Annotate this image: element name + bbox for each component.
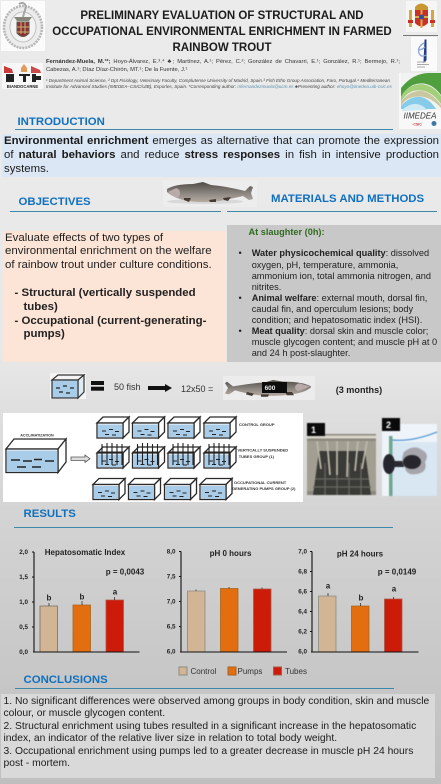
logo: Spanish coat of arms (406, 1, 437, 32)
chart: pH 24 hours: a (392, 584, 397, 594)
panel: materials and methods: Animal welfare: external mouth, dorsal fin, (252, 293, 427, 303)
logo: IMEDEA (399, 73, 441, 129)
chart: pH 0 hours: 6,0 (167, 648, 176, 656)
chart: pH 0 hours: pH 0 hours (210, 549, 252, 558)
heading: materials and methods: MATERIALS AND METHODS (271, 193, 424, 205)
panel: objectives (3, 230, 226, 362)
panel: objectives: of rainbow trout under culture conditions. (5, 259, 212, 271)
chart: pH 24 hours: 6,4 (298, 608, 307, 616)
panel: materials and methods: • (238, 326, 242, 336)
panel: conclusions: 1. No significant differences were observed among groups in body condition, skin and muscle (4, 696, 429, 706)
chart: pH 24 hours: 6,0 (298, 648, 307, 656)
title: PRELIMINARY EVALUATION OF STRUCTURAL AND (80, 10, 364, 22)
image: trout with total count (223, 376, 315, 400)
panel: materials and methods: condition; and hepatosomatic index (HSI). (252, 315, 422, 325)
panel: conclusions: post - mortem. (4, 758, 70, 769)
chart: hepatosomatic index: 1,5 (19, 574, 28, 581)
chart: pH 24 hours: 6,8 (298, 568, 307, 576)
control group tanks (97, 417, 236, 438)
panel: materials and methods: Meat quality: dorsal skin and muscle color; (252, 326, 428, 336)
chart: pH 0 hours: 7,0 (167, 598, 176, 606)
panel: introduction: Environmental enrichment emerges as alternative that can promote the expression (4, 135, 439, 147)
chart: pH 24 hours (298, 548, 418, 656)
chart: pH 0 hours: 6,5 (167, 624, 176, 630)
large acclimatization tank (6, 434, 66, 472)
experimental design row (50, 373, 382, 400)
heading: objectives: OBJECTIVES (18, 196, 91, 208)
chart: pH 24 hours: 6,6 (298, 588, 307, 596)
panel: conclusions: 2. Structural enrichment using tubes resulted in a significant increase in the hepatosomatic (4, 720, 416, 732)
panel: introduction: of natural behaviors and reduce stress responses in fish in intensive production (4, 149, 439, 161)
panel: introduction (2, 134, 441, 177)
arrow: to groups (71, 455, 90, 462)
chart: hepatosomatic index: b (47, 594, 52, 602)
title: OCCUPATIONAL ENVIRONMENTAL ENRICHMENT IN FARMED (52, 26, 392, 38)
panel: materials and methods: Water physicochemical quality: dissolved (252, 248, 429, 258)
diagram: experimental groups (3, 413, 303, 502)
chart: hepatosomatic index: 2,0 (19, 549, 28, 556)
chart: pH 24 hours: a (326, 582, 331, 590)
heading: introduction: INTRODUCTION (18, 116, 105, 128)
chart legend: Pumps (238, 667, 262, 676)
panel: materials and methods: • (238, 293, 242, 303)
icon: equals sign (91, 381, 104, 391)
panel: materials and methods (226, 225, 441, 362)
logo: university crest (1, 1, 45, 51)
panel: materials and methods: At slaughter (0h): (248, 227, 325, 237)
chart: pH 24 hours: pH 24 hours (337, 550, 384, 558)
panel: materials and methods: caudal fin, and operculum lesions; body (252, 304, 413, 314)
authors: Fernández-Muela, M.¹*; Hoyo-Álvarez, E.³˒⁴ ♣; Martínez, A.¹; Pérez, C.²; González de Chavarri, E.¹; González, R.¹; Bermejo, R.¹; (46, 59, 400, 65)
chart: hepatosomatic index: b (80, 592, 85, 602)
affiliations: ¹ Department Animal Science, ² Dpt Fisiology, Veterinary Faculty, Complutense University of Madrid, Spain.³ Fish Etho Group Association, Faro, Portugal.⁴ Mediterranean (46, 78, 390, 83)
label: duration: (3 months) (336, 385, 382, 395)
panel: materials and methods: nitrites. (252, 282, 281, 292)
heading: results: RESULTS (24, 508, 76, 520)
chart: hepatosomatic index: 0,0 (19, 649, 28, 656)
group labels: TUBES GROUP (1) (239, 454, 275, 459)
chart: hepatosomatic index: Hepatosomatic Index (45, 548, 126, 557)
panel: conclusions (1, 694, 435, 778)
panel: materials and methods: and 24 h post-slaughter. (252, 348, 350, 358)
panel: materials and methods: muscle glycogen content; and muscle pH at 0 (252, 337, 437, 347)
panel: objectives: - Occupational (current-generating- (14, 315, 206, 327)
group labels (232, 422, 296, 491)
chart: hepatosomatic index: p = 0,0043 (106, 568, 145, 576)
chart: hepatosomatic index: a (113, 588, 118, 596)
image: trout with total count: 600 (265, 385, 276, 392)
label: 12x50: 12x50 = (181, 384, 213, 394)
panel: materials and methods: oxygen, pH, temperature, ammonia, (252, 260, 398, 270)
panel: materials and methods: • (238, 248, 242, 258)
photo 2: current pump (381, 417, 438, 497)
panel: conclusions: index, an indicator of the relative liver size in relation to total body weight. (4, 733, 337, 744)
group labels: OCCUPATIONAL CURRENT (234, 480, 287, 485)
label: 50 fish: 50 fish (114, 382, 141, 392)
chart: hepatosomatic index: 1,0 (19, 599, 28, 606)
panel: objectives: pumps) (24, 328, 65, 340)
title (52, 10, 392, 54)
chart legend (178, 666, 307, 676)
panel: objectives: - Structural (vertically suspended (14, 287, 196, 299)
panel: introduction: systems. (4, 163, 49, 175)
authors (46, 58, 400, 73)
chart: hepatosomatic index: 0,5 (19, 624, 28, 631)
heading: conclusions: CONCLUSIONS (24, 674, 108, 686)
panel: conclusions: 3. Occupational enrichment using pumps led to a greater decrease in muscle pH 24 hours (4, 746, 413, 756)
logo: IMEDEA: ·CSIC (412, 122, 422, 126)
affiliations: Institute for Advanced Studies (IMEDEA–CSIC/UIB), Esporles, Spain. *Corresponding author: mfernandezmuela@ucm.es ♣Presenting author: ehoyo@imedea.uib-csic.es (46, 84, 392, 89)
group labels: CONTROL GROUP (239, 422, 275, 427)
chart: hepatosomatic index (19, 548, 145, 656)
panel: objectives: tubes) (24, 301, 58, 313)
chart: pH 24 hours: 6,2 (298, 628, 307, 636)
logo: IMEDEA: IIMEDEA (404, 112, 436, 120)
chart legend: Tubes (285, 667, 307, 676)
authors: Cabezas, A.¹; Díaz Díaz-Chirón, MT.¹; De la Fuente, J.¹ (46, 67, 187, 73)
chart: pH 24 hours: b (359, 594, 364, 602)
logo: Biandocarne: BIANDOCARNE (7, 84, 38, 89)
panel: conclusions: colour, or muscle glycogen content. (4, 708, 165, 719)
tubes group tanks (97, 443, 236, 468)
logo: institution emblem (411, 37, 437, 71)
icon: fish tank (50, 373, 86, 400)
chart: pH 0 hours: 7,5 (167, 574, 176, 580)
logo divider (403, 34, 438, 36)
panel: objectives: environmental enrichment on the welfare (5, 245, 212, 257)
icon: arrow (148, 384, 172, 392)
pumps group tanks (93, 478, 232, 500)
large acclimatization tank: ACCLIMATIZATION (20, 434, 54, 438)
chart: pH 24 hours: 7,0 (298, 548, 307, 556)
chart: pH 0 hours: 8,0 (167, 548, 176, 556)
image: rainbow trout (163, 180, 257, 207)
logo: Biandocarne (2, 63, 43, 89)
photo 1: suspended tubes: 1 (311, 425, 316, 435)
panel: materials and methods: ammonium ion, total ammonia nitrogen, and (252, 271, 431, 281)
affiliations (46, 78, 392, 89)
photo 2: current pump: 2 (386, 420, 391, 430)
chart legend: Control (190, 667, 217, 676)
chart: pH 24 hours: p = 0,0149 (378, 568, 417, 576)
group labels: GENERATING PUMPS GROUP (2) (232, 486, 296, 491)
group labels: VERTICALLY SUSPENDED (238, 448, 288, 452)
chart: pH 0 hours (166, 548, 287, 656)
title: RAINBOW TROUT (172, 42, 272, 54)
photo 1: suspended tubes (306, 422, 376, 496)
panel: objectives: Evaluate effects of two types of (5, 232, 163, 244)
